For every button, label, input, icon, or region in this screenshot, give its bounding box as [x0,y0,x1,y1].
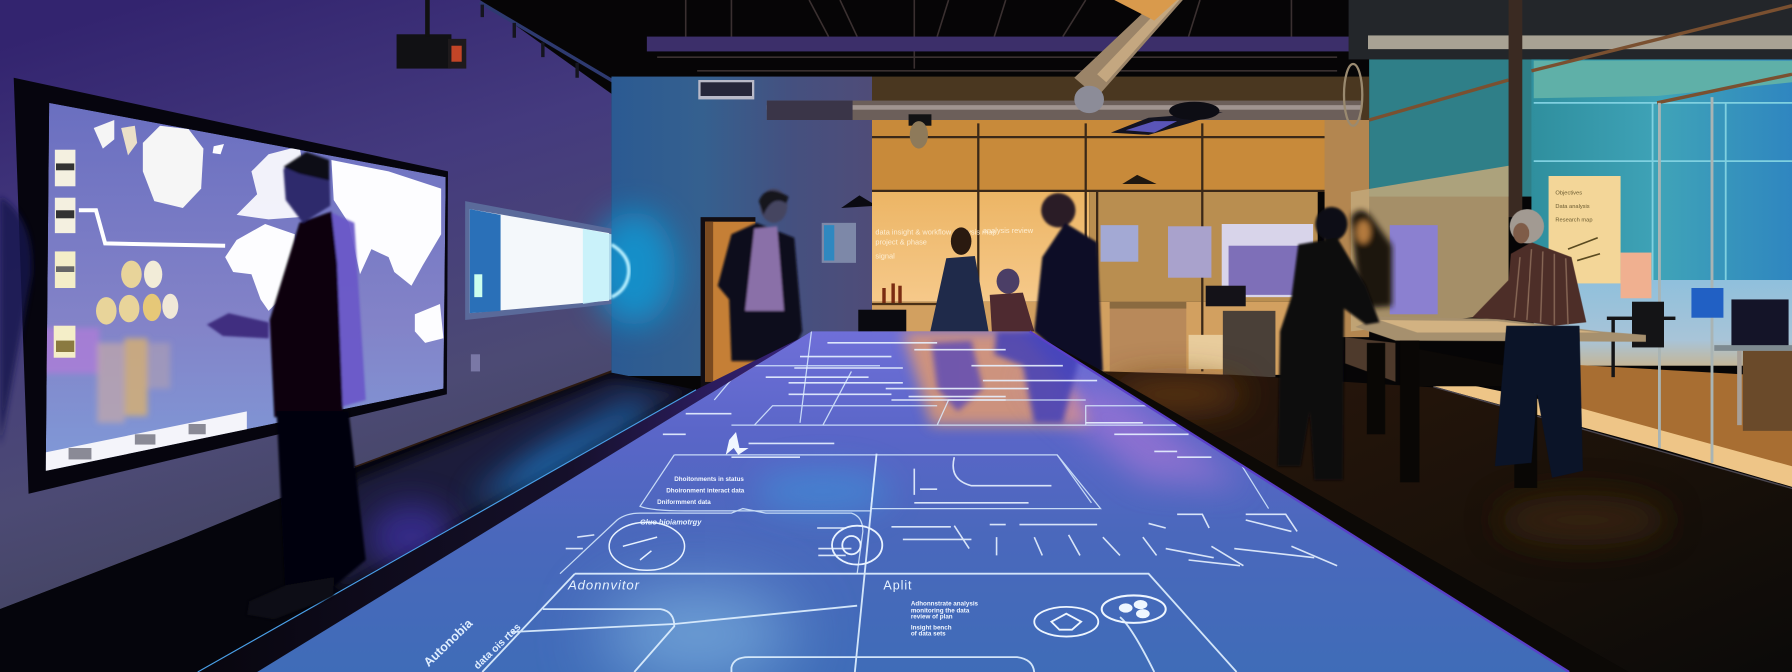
standing table [1345,317,1646,488]
room lower wall [1534,280,1792,366]
table left rim [198,331,811,672]
projected text on wall: analysis review [983,226,1034,235]
torso [270,211,343,417]
teal duct [1534,61,1792,98]
table legs [1367,341,1537,488]
panel lines [482,454,1237,672]
panel heading text [567,518,912,593]
poster on wall [1549,176,1621,283]
diagonal duct [1074,0,1183,97]
lower wall [872,302,1329,375]
hair [283,152,329,181]
panel heading text: Adonnvitor [567,578,640,593]
face [1513,223,1529,243]
second reflected figure [931,341,983,411]
legs [1495,326,1583,478]
panel heading text: Gluo bioiamotrgy [640,518,702,527]
man in navy suit [1034,193,1103,371]
thumbnail cards [54,150,75,358]
framed picture on back wall [822,223,856,263]
lavender torso [326,211,366,411]
office chairs and desks [1607,302,1792,431]
bulb icons [96,261,178,325]
baseboard [354,370,611,478]
table left edge line [198,390,696,672]
blurred person behind [1351,210,1392,309]
upper panel outlines [560,331,1269,574]
legs [277,411,366,600]
rear wall displays [1101,224,1313,297]
teal main room [1531,59,1792,311]
table light effects [421,331,1337,672]
shirt [745,226,784,311]
orange room [872,120,1329,375]
cyan floor glow [469,400,657,503]
shoes [247,577,334,619]
bright table surface [1379,320,1600,333]
head [283,154,330,223]
connector path on display [79,210,225,246]
panel body text: Adhonnstrate analysis [911,601,979,608]
left wall [0,0,611,609]
wall switch [471,354,480,371]
small wall display [465,201,611,320]
upper orange wall [872,120,1329,191]
lower left table text [425,620,520,669]
ceiling beam [647,37,1355,51]
lower left table text: data ois rtes [472,622,524,672]
window grid lines [1534,103,1792,297]
hair [759,191,789,215]
hanging device [1111,102,1223,135]
lower left table text: Autonobia [421,616,476,670]
panel body text: of data sets [911,630,946,637]
panel body text: Dniformment data [657,499,711,506]
column [1509,0,1522,217]
panel body text: monitoring the data [911,608,970,615]
gauge widget [609,522,685,570]
room frame lines [872,123,1326,371]
cross bar [1416,349,1506,386]
shelf objects [882,283,902,304]
poster on wall: Objectives [1555,190,1582,196]
purple reflected display [1390,225,1438,314]
bright blue bloom [600,589,794,672]
orange reflection [903,331,1091,425]
back wall doorway [701,217,755,389]
purple floor glow [368,503,455,571]
flower circle icon [1102,595,1166,623]
outstretched hand [207,313,269,338]
reception desk [1110,286,1275,377]
glass rooms at right [1325,0,1792,489]
poster on wall: Research map [1555,218,1593,224]
head [760,189,787,223]
tan side wall [1325,120,1369,337]
shelf [872,303,941,305]
specimen tiles [94,120,137,155]
bottom strip [45,411,247,473]
dark violet floor band [309,377,696,589]
tinted bars on display [31,328,170,423]
hanging lamp [841,195,877,208]
panel body text: review of plan [911,613,953,620]
small text bars on table [566,343,1337,566]
bloom at lower centre [754,469,891,514]
star marker [726,432,749,455]
left floor [0,372,694,609]
person at the wall display [207,152,366,619]
small ceiling unit [1122,175,1157,184]
pink reflection right [1023,377,1246,486]
table right rim [1030,331,1629,672]
back wall with blue light [611,77,872,376]
projected text on wall: signal [875,251,895,260]
glass reflection panel [1351,166,1509,331]
projected text on wall: data insight & workflow analysis map [875,227,996,236]
blurred person at far left [0,197,32,446]
ceiling band right [1349,0,1792,59]
poster on wall: Data analysis [1555,204,1590,210]
rear room wall [1089,192,1318,302]
table surface [257,331,1569,672]
glass base line [1433,387,1792,489]
seated person [990,269,1034,334]
main duct [767,101,1361,120]
blue glow from the screen [593,211,675,326]
blue monitors [1691,288,1789,347]
map of the world [213,144,443,343]
head [1510,209,1544,243]
panel body text [657,476,979,637]
circular widget [832,526,882,565]
ceiling beams and cabling [657,0,1337,71]
strip labels [69,424,206,459]
light ring beside the small display [611,245,629,297]
diagonal duct highlight [1097,0,1179,82]
person by doorway [718,189,802,361]
projector with red display [397,0,466,69]
duct elbow [1074,86,1104,113]
ceiling edge truss above the left wall [480,2,634,94]
shirt stripes [1514,249,1568,325]
ceiling pipe [1368,35,1792,49]
shirt [1472,242,1586,326]
house circle icon [1034,607,1098,637]
table top [1355,317,1646,342]
person with striped shirt [1472,209,1586,478]
large wall display frame [14,78,448,494]
black chair at table end [858,310,906,331]
large wall display [31,103,446,473]
room floor [1571,365,1792,469]
person leaning at table [1278,207,1379,480]
right floor [1103,371,1792,672]
panel heading text: Aplit [883,579,912,593]
table violet right edge [1030,331,1569,672]
top polygon map tile [143,126,203,208]
lit wall [872,192,1089,302]
duct ring [1344,64,1362,126]
orange ceiling panel [1114,0,1177,21]
projected text on wall: project & phase [875,238,927,247]
panel body text: Dhoironment interact data [666,488,745,495]
reflected figure [994,331,1080,423]
jacket and legs [718,223,802,361]
panel body text: Insight bench [911,625,952,632]
upper duct wall [872,77,1369,120]
teal left room [1369,59,1541,197]
person with checked shirt [930,227,989,331]
diagonal reflections [1369,6,1792,120]
panel body text: Dhoitonments in status [674,476,744,483]
projected text on wall [875,226,1034,260]
glass panel posts [1659,97,1712,463]
floor reflections [1109,378,1669,545]
ceiling vent [698,80,754,99]
side board [1345,337,1395,382]
projector lamp [909,114,931,149]
lit floor strip [1433,377,1792,487]
note on wall [1621,253,1651,298]
